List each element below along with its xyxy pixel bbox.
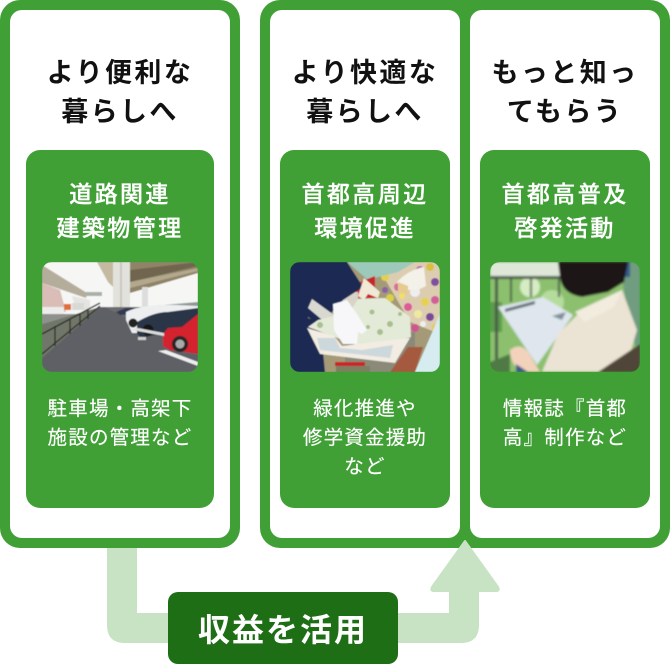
card: expressway surroundings: 修学資金援助 xyxy=(303,427,427,449)
heading: more convenient living: 暮らしへ xyxy=(61,97,179,127)
panel: more convenient living xyxy=(0,0,240,548)
card: awareness activities: 啓発活動 xyxy=(514,215,616,241)
heading: get to know us: もっと知っ xyxy=(492,58,638,88)
heading: more convenient living: より便利な xyxy=(47,58,193,88)
heading: get to know us: てもらう xyxy=(507,97,623,127)
card: awareness activities: 高』制作など xyxy=(503,427,627,449)
heading: get to know us xyxy=(492,58,638,127)
card: awareness activities xyxy=(480,150,650,508)
card: road-related buildings: 道路関連 xyxy=(69,181,171,207)
card: expressway surroundings xyxy=(280,150,450,508)
card: awareness activities: 情報誌『首都 xyxy=(503,398,627,420)
card: awareness activities: 首都高普及 xyxy=(502,181,628,207)
label: use of revenue: 収益を活用 xyxy=(198,612,368,648)
heading: more comfortable living: より快適な xyxy=(292,58,438,88)
photo: parking under expressway xyxy=(42,262,198,372)
card: expressway surroundings: 環境促進 xyxy=(314,215,416,241)
photo: woman reading magazine xyxy=(490,262,640,372)
card: road-related buildings: 建築物管理 xyxy=(56,215,184,241)
heading: more comfortable living xyxy=(292,58,438,127)
card: road-related buildings: 施設の管理など xyxy=(48,427,192,449)
heading: more comfortable living: 暮らしへ xyxy=(306,97,424,127)
heading: more convenient living xyxy=(47,58,193,127)
card: expressway surroundings: 首都高周辺 xyxy=(302,181,428,207)
panel: more comfortable living and awareness xyxy=(260,0,670,548)
card: road-related buildings: 駐車場・高架下 xyxy=(48,398,192,420)
card: expressway surroundings: 緑化推進や xyxy=(313,398,417,420)
photo: gloved hands holding flower basket xyxy=(290,262,440,372)
card: road-related buildings xyxy=(26,150,214,508)
label: use of revenue xyxy=(168,592,398,664)
card: expressway surroundings: など xyxy=(344,456,386,478)
